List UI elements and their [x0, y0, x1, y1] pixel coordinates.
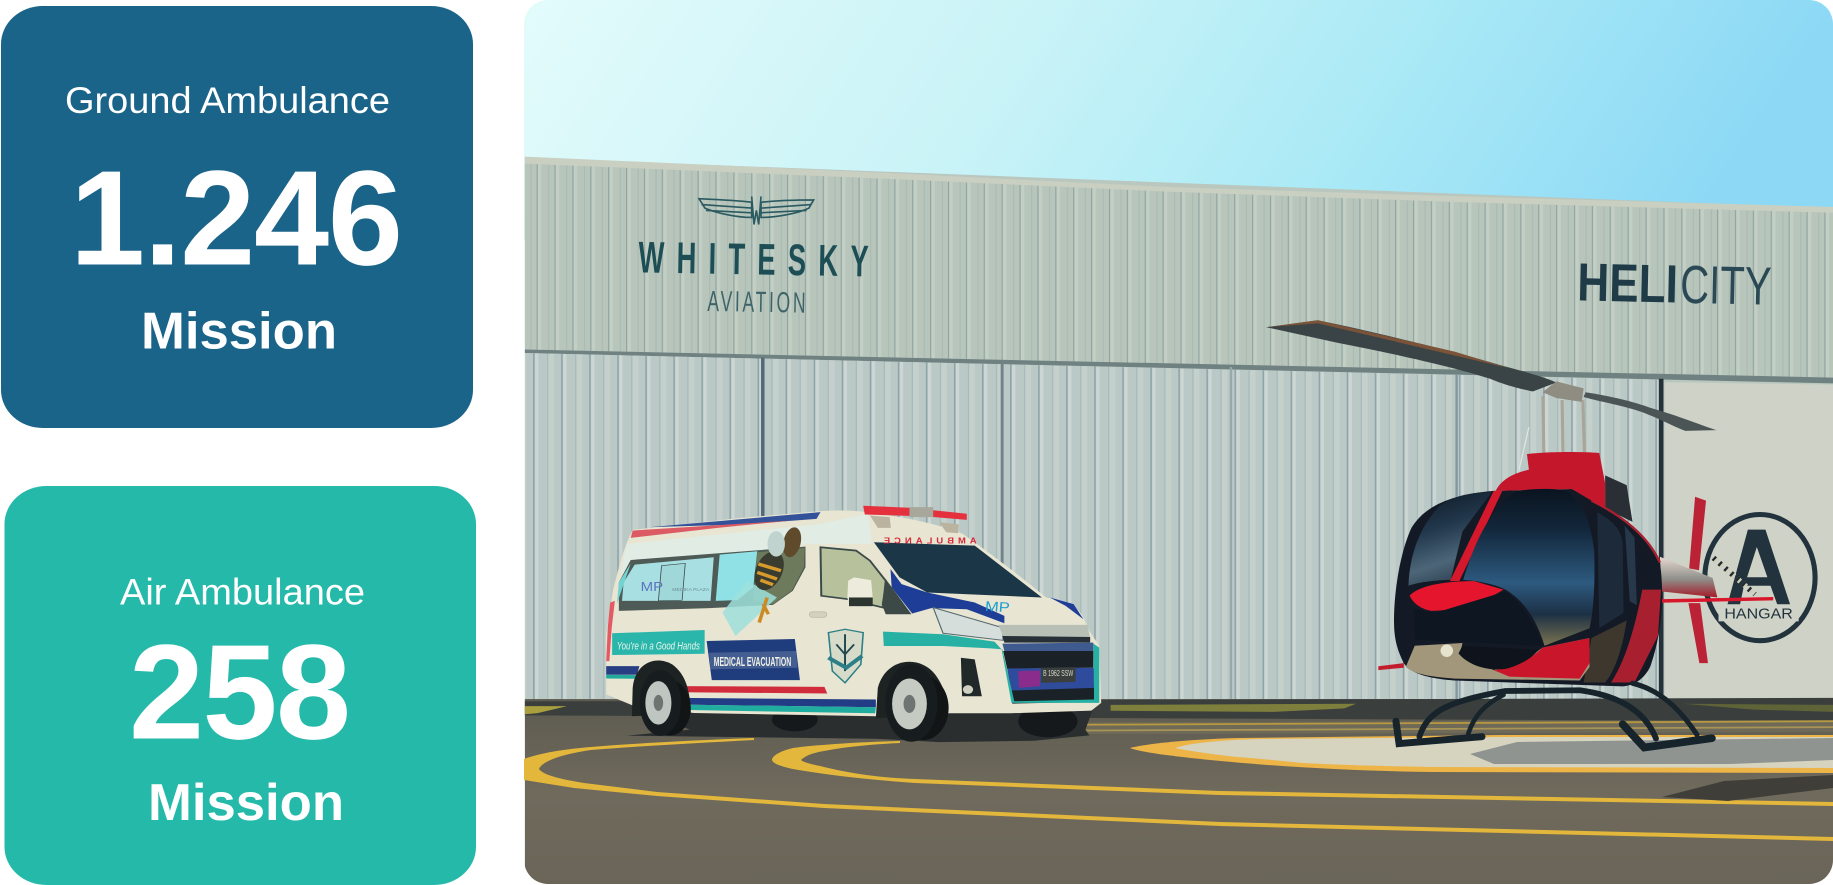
- rear wheel: [642, 681, 691, 736]
- logo on window: mp: MP: [641, 579, 663, 594]
- emblem: [828, 629, 863, 683]
- label: ground ambulance: Ground Ambulance: [65, 79, 390, 121]
- helicopter: [1266, 320, 1773, 747]
- logo: a hangar: [1705, 515, 1815, 641]
- front door window: [821, 547, 886, 608]
- logo: whitesky aviation: [638, 196, 869, 320]
- lower nose reflective: [1406, 638, 1589, 681]
- ambulance: MP: [984, 599, 1010, 616]
- number: 1.246: 1.246: [70, 142, 403, 294]
- logo: a hangar: HANGAR: [1724, 607, 1793, 623]
- right windshield: [1463, 489, 1595, 646]
- side windows: [619, 547, 805, 611]
- engine cowl: [1605, 475, 1633, 522]
- plate: [1041, 667, 1076, 683]
- landing skids: [1396, 683, 1712, 747]
- plate: B 1962 SSW: [1043, 669, 1074, 678]
- apron: [525, 698, 1833, 885]
- ambulance: [606, 506, 1101, 742]
- hangar building: [525, 157, 1833, 885]
- unit: mission: Mission: [141, 302, 337, 360]
- logo: helicity: [1580, 264, 1771, 304]
- outer yellow curve: [524, 738, 1833, 841]
- logo: helicity: CITY: [1680, 255, 1772, 317]
- number: 258: 258: [129, 616, 351, 768]
- tail light: [606, 601, 615, 661]
- photo: ambulance and helicopter at hangar: [524, 0, 1833, 885]
- ambulance: MEDICAL EVACUATION: [714, 654, 791, 669]
- unit: mission: Mission: [148, 774, 344, 832]
- tail fin: [1657, 497, 1773, 663]
- teal trim: [883, 632, 1099, 703]
- main rotor blades: [1266, 320, 1717, 431]
- door handle: [809, 612, 827, 617]
- logo: whitesky aviation: AVIATION: [707, 285, 806, 320]
- fog lamp vent: [961, 658, 982, 696]
- panel: air ambulance: [4, 486, 476, 885]
- apron markings: [524, 738, 1833, 841]
- side windows: [1597, 512, 1624, 628]
- red pillar: [1450, 491, 1502, 581]
- light bar: AMBULANCE: [884, 536, 977, 545]
- side body red: [1611, 590, 1661, 682]
- right hangar door: [1665, 382, 1833, 698]
- far wheels: [772, 714, 818, 732]
- wheel arches: [632, 661, 691, 716]
- chin: [1414, 592, 1543, 646]
- panel: ground ambulance: [1, 6, 473, 428]
- front wheel: [888, 678, 949, 742]
- windshield: [874, 542, 1042, 597]
- logo: helicity: HELI: [1577, 252, 1679, 315]
- front grille and bumper: [998, 625, 1090, 638]
- bee mascot: [722, 526, 804, 636]
- van body: [606, 510, 1101, 716]
- inner yellow curve: [772, 741, 1833, 806]
- left windshield: [1408, 492, 1492, 586]
- body stripes: [680, 686, 827, 694]
- headlight: [933, 608, 1003, 640]
- side stickers: You're in a Good Hands: [617, 639, 700, 652]
- ambulance: MEDIKA PLAZA: [672, 587, 710, 593]
- red roof: [1496, 452, 1605, 508]
- nose red panel: [1410, 581, 1503, 611]
- fuselage: [1394, 489, 1662, 686]
- ground shadow: [627, 708, 1093, 742]
- side stickers: [612, 630, 705, 655]
- helipad: [1130, 735, 1833, 801]
- blue fender: [890, 569, 1004, 623]
- rotor mast: [1519, 381, 1584, 470]
- mirror: [847, 577, 873, 608]
- roof stripes: [650, 512, 821, 527]
- sky: [524, 0, 1833, 240]
- label: air ambulance: Air Ambulance: [120, 570, 365, 612]
- logo: whitesky aviation: WHITESKY: [638, 233, 869, 286]
- light bar: [863, 506, 977, 545]
